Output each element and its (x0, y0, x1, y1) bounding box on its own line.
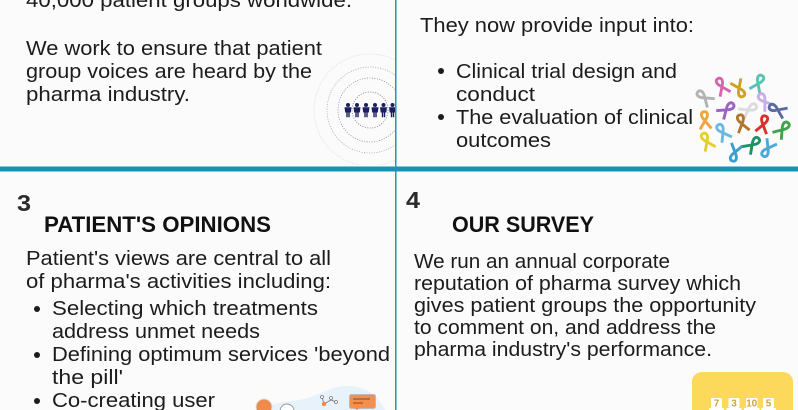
card: yellow scores: 7 (714, 398, 720, 410)
list: input areas (438, 61, 693, 152)
text: opinions intro: of pharma's activities including: (26, 271, 331, 293)
number 4: 4 (406, 187, 420, 213)
icon: people with concentric rings (314, 54, 395, 165)
icon: awareness ribbons (694, 73, 792, 163)
illustration: co-creation blob and icons (256, 386, 385, 410)
heading: our survey: OUR SURVEY (452, 212, 594, 237)
list: pharma activities: the pill' (52, 367, 123, 389)
text: opinions intro: Patient's views are central to all (26, 248, 331, 270)
text: survey description: We run an annual corporate (414, 251, 670, 273)
text: intro paragraph (26, 0, 352, 106)
text: survey description (414, 251, 756, 361)
list: input areas: outcomes (456, 130, 551, 152)
list: input areas: Clinical trial design and (456, 61, 677, 83)
text: survey description: to comment on, and address the (414, 317, 716, 339)
text: survey description: reputation of pharma survey which (414, 273, 741, 295)
panel: patient input (420, 15, 792, 163)
panel: patient's opinions (17, 190, 390, 410)
number 3: 3 (17, 190, 31, 216)
text: intro paragraph: group voices are heard by the (26, 61, 312, 83)
list: pharma activities: Defining optimum services 'beyond (52, 344, 390, 366)
list: pharma activities: address unmet needs (52, 321, 260, 343)
text: survey description: gives patient groups the opportunity (414, 295, 756, 317)
heading: patient's opinions: PATIENT'S OPINIONS (44, 212, 271, 237)
card: yellow scores (692, 372, 793, 410)
text: opinions intro (26, 248, 331, 293)
panel: our survey (406, 187, 793, 410)
divider: horizontal bar (0, 166, 798, 172)
divider: vertical line (395, 0, 396, 410)
text: survey description: pharma industry's performance. (414, 339, 712, 361)
list: pharma activities: Selecting which treatments (52, 298, 318, 320)
text: input lead-in: They now provide input into: (420, 15, 694, 37)
list: input areas: The evaluation of clinical (456, 107, 693, 129)
panel: patient groups (26, 0, 426, 166)
text: intro paragraph: pharma industry. (26, 84, 190, 106)
text: intro paragraph: We work to ensure that patient (26, 38, 322, 60)
card: yellow scores: 3 (731, 398, 737, 410)
card: yellow scores: 5 (766, 398, 772, 410)
card: yellow scores: 10 (746, 398, 758, 410)
list: input areas: conduct (456, 84, 535, 106)
list: pharma activities (34, 298, 390, 410)
